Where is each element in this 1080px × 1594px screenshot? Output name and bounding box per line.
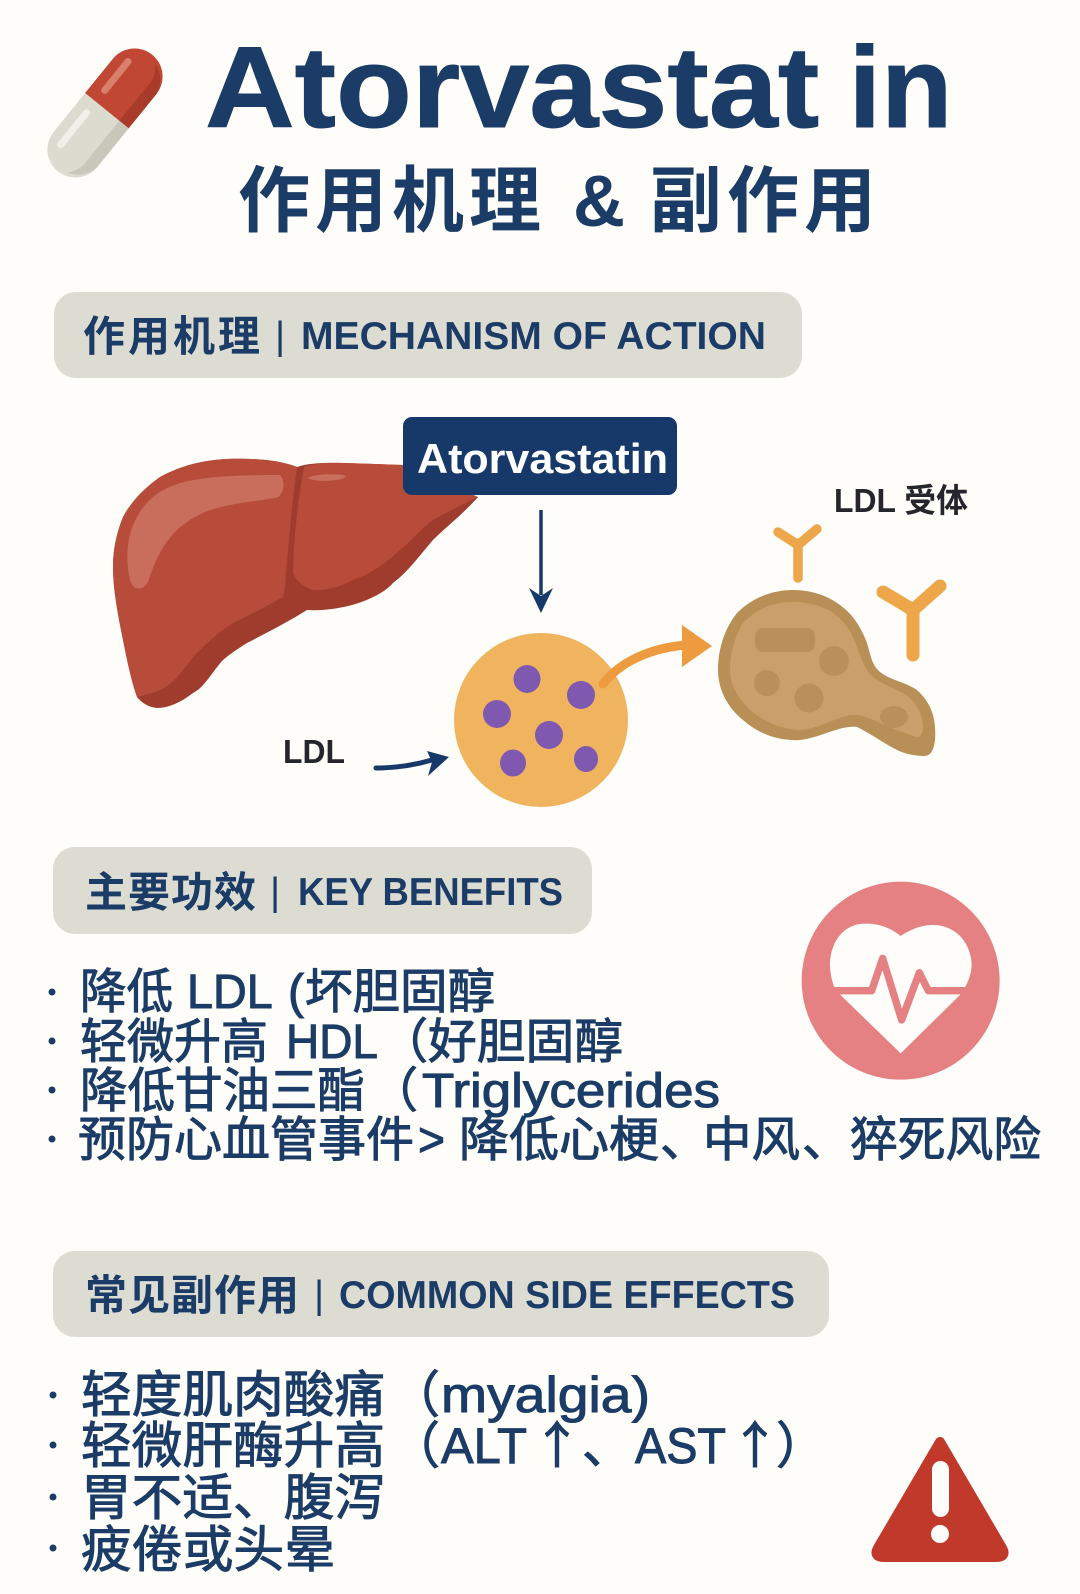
- subtitle: 作用机理: [238, 162, 546, 242]
- text block: key benefits list: HDL: [286, 1016, 378, 1069]
- icon: liver: [113, 459, 478, 708]
- icon: red and white capsule pill: [36, 37, 174, 189]
- title: in: [849, 24, 952, 152]
- text block: key benefits list: 好胆固醇: [428, 1016, 623, 1069]
- icon: heart with pulse: [802, 882, 1000, 1080]
- text block: side effects list: 轻微肝酶升高: [81, 1418, 385, 1474]
- text block: key benefits list: 坏胆固醇: [305, 966, 495, 1019]
- text block: side effects list: ）: [776, 1418, 826, 1474]
- panel: mechanism of action heading: [54, 292, 802, 378]
- text block: key benefits list: （: [370, 1065, 418, 1118]
- arrow: Atorvastatin to hepatocyte: [529, 510, 553, 613]
- icon: LDL receptor large: [883, 586, 940, 655]
- text block: side effects list: ↑: [730, 1406, 780, 1478]
- text block: key benefits list: 、: [802, 1114, 850, 1167]
- icon: brown cell with organelles: [718, 590, 935, 756]
- arrow: orange curved arrow: [603, 625, 712, 684]
- text block: side effects list: ALT: [441, 1418, 527, 1474]
- heading text: mechanism: |: [275, 315, 285, 358]
- icon: yellow cell with purple LDL particles: [454, 633, 628, 807]
- text block: side effects list: 胃不适、腹泻: [81, 1470, 385, 1526]
- label: Atorvastatin box: Atorvastatin: [417, 435, 668, 482]
- heading text: key benefits: |: [270, 871, 280, 914]
- subtitle: [238, 162, 881, 242]
- text block: side effects list: 轻度肌肉酸痛: [81, 1367, 385, 1423]
- icon: LDL receptor small: [778, 529, 817, 578]
- heading text: side effects: 常见副作用: [85, 1272, 299, 1319]
- text block: key benefits list: 轻微升高: [80, 1016, 268, 1069]
- label: Atorvastatin box: [403, 417, 677, 495]
- label: LDL receptor: LDL 受体: [834, 482, 968, 519]
- label: LDL: LDL: [283, 733, 345, 770]
- heading text: key benefits: KEY BENEFITS: [298, 871, 563, 914]
- text block: side effects list: [50, 1367, 826, 1578]
- text block: side effects list: （: [390, 1418, 440, 1474]
- heading text: side effects: COMMON SIDE EFFECTS: [339, 1274, 795, 1317]
- text block: key benefits list: (: [288, 966, 304, 1019]
- text block: side effects list: AST: [635, 1418, 726, 1474]
- arrow: LDL into cell: [376, 751, 449, 776]
- subtitle: 副作用: [650, 162, 881, 242]
- text block: key benefits list: 中风: [703, 1114, 800, 1167]
- chart: mechanism diagram: [113, 417, 968, 807]
- panel: key benefits heading: [53, 847, 592, 934]
- text block: key benefits list: 猝死风险: [850, 1114, 1041, 1167]
- heading text: key benefits: 主要功效: [85, 869, 256, 916]
- text block: side effects list: ↑: [532, 1406, 582, 1478]
- heading text: side effects: |: [314, 1274, 324, 1317]
- icon: warning triangle: [876, 1442, 1004, 1557]
- text block: key benefits list: 、: [660, 1114, 708, 1167]
- text block: side effects list: 疲倦或头晕: [81, 1522, 335, 1578]
- heading text: mechanism: 作用机理: [83, 313, 260, 360]
- text block: key benefits list: 降低心梗: [459, 1114, 659, 1167]
- subtitle: &: [573, 162, 630, 242]
- heading text: mechanism: MECHANISM OF ACTION: [301, 315, 766, 358]
- text block: side effects list: 、: [582, 1418, 632, 1474]
- text block: key benefits list: 预防心血管事件: [78, 1114, 414, 1167]
- text block: key benefits list: >: [418, 1114, 445, 1167]
- text block: key benefits list: 降低甘油三酯: [80, 1065, 365, 1118]
- panel: common side effects heading: [53, 1251, 829, 1337]
- text block: side effects list: （: [390, 1367, 440, 1423]
- text block: key benefits list: LDL: [187, 966, 272, 1019]
- text block: key benefits list: 降低: [80, 966, 173, 1019]
- text block: side effects list: myalgia): [441, 1367, 650, 1423]
- text block: key benefits list: （: [380, 1016, 428, 1069]
- title: Atorvastat: [205, 24, 819, 152]
- text block: key benefits list: [48, 966, 1041, 1167]
- text block: key benefits list: Triglycerides: [422, 1065, 720, 1118]
